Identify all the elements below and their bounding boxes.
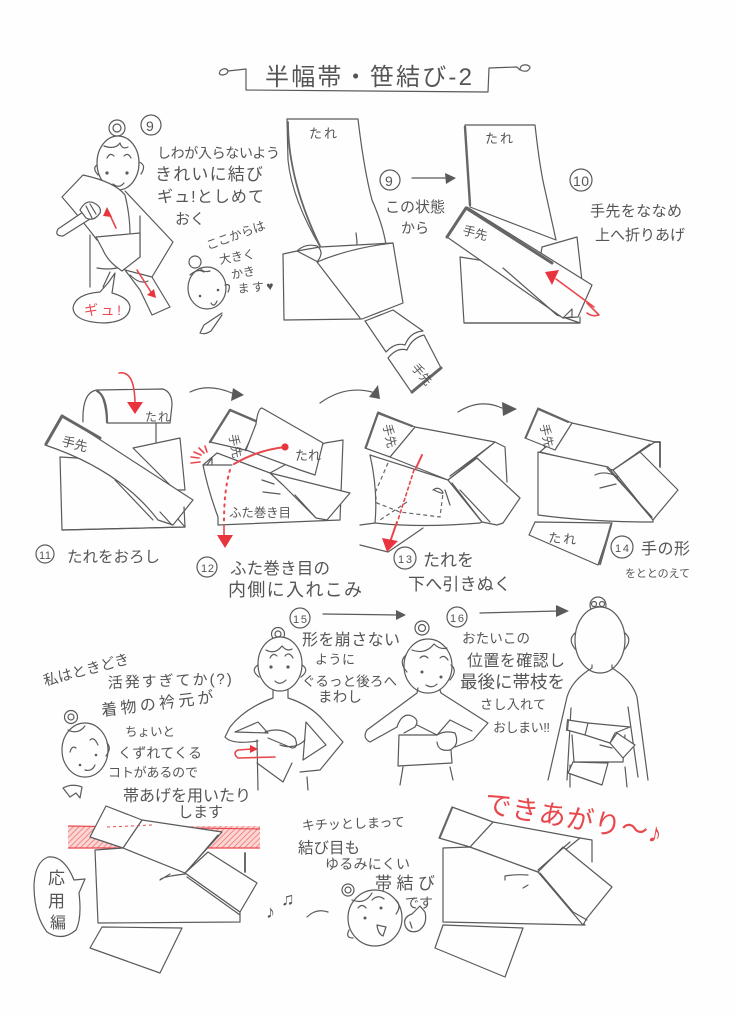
instruction text step 16: さし入れて [480,697,546,712]
diagram: arrange te shape: 手先 [537,423,556,449]
instruction text step 9 [155,145,280,228]
side note text: くずれてくる [118,745,202,761]
step number 10 [570,169,592,191]
side note: from here drawn large [204,218,274,296]
panel: step 16 [365,597,648,787]
panel: applied version note [34,651,260,973]
caption step 11: 11 [39,550,51,562]
diagram: arrange te shape [525,408,678,565]
side note: from here drawn large: ここからは [204,218,267,253]
panel: step 12 [191,408,362,600]
panel: middle comment [266,814,435,946]
diagram: lower the tare: たれ [145,410,170,424]
step number 16 with arrow [447,605,569,627]
side note: from here drawn large: ます♥ [237,279,274,296]
caption step 14: 14 [615,543,629,555]
title: 半幅帯・笹結び-2 [265,64,472,91]
instruction text step 15: ように [315,652,355,667]
diagram: fold te-saki diagonally: 手先 [461,223,489,243]
instruction text step 9: おく [175,211,205,228]
caption step 13 [394,547,511,594]
side note text: 帯あげを用いたり [123,787,251,805]
instruction text step 10: 手先をななめ [590,203,682,220]
arrow: 13 to 14 [458,402,517,416]
panel: step 15 [225,608,406,790]
caption: から [401,220,429,236]
figure: back view woman [548,597,648,787]
arrow: 11 to 12 [190,388,244,401]
panel: step 10 [447,125,685,323]
music notes: ♪ [266,902,275,922]
speech bubble: gyu: ギュ! [84,302,121,318]
title [219,64,530,92]
step number 15 with arrow [290,608,406,628]
side note text: 私はときどき [42,651,131,690]
diagram: fold te-saki diagonally [447,125,599,323]
side note: from here drawn large: かき [230,264,256,282]
step number 9 [141,115,161,135]
diagram: finished knot [435,807,612,977]
instruction text step 16: 最後に帯枝を [460,672,565,692]
diagram: with obiage band [68,806,260,973]
diagram: arrange te shape: たれ [548,530,577,547]
side note text: します [178,804,223,821]
comment text: です [405,895,433,911]
side note text [42,651,251,821]
step number 10: 10 [573,173,589,189]
annotation: from this state [380,170,456,236]
red arrow: lower tare [119,373,143,414]
speech bubble: applied version: 編 [50,914,66,932]
instruction text step 16: おたいこの [462,631,530,646]
figure: front woman [365,621,488,785]
diagram: pull tare down [360,412,520,552]
figure: woman tightening obi [57,120,173,315]
caption step 13: 下へ引きぬく [408,575,511,594]
diagram: lower the tare: 手先 [60,433,89,455]
step number 8: 9 [385,173,393,189]
small head with hand [62,710,109,798]
diagram: lower the tare [45,389,193,530]
red pull arrow [382,455,422,552]
side note text: 活発すぎてか(?) [108,671,232,692]
instruction text step 10 [590,203,685,244]
diagram: pull tare down: 手先 [380,423,399,449]
side note text: コトがあるので [108,765,198,780]
music notes: ♫ [281,889,294,909]
panel: step 8 obi state [283,119,441,393]
panel: finished result [435,788,664,977]
side note text: ちょいと [125,725,175,739]
instruction text step 9: きれいに結び [155,165,263,184]
figure: turning the knot around [225,628,343,790]
diagram: fold te-saki diagonally: たれ [485,131,513,146]
instruction text step 15: 形を崩さない [302,631,400,649]
comment text: 結び目も [298,839,360,857]
instruction text step 15: まわし [318,689,362,706]
speech bubble: applied version: 用 [48,892,65,911]
caption step 11 [36,545,160,566]
instruction text step 15 [302,631,400,706]
instruction text step 9: ギュ!としめて [157,188,264,206]
step number 15 with arrow: 15 [293,614,307,626]
small head with pointing hand [188,256,229,334]
panel: step 9 figure [57,115,280,334]
diagram: insert inside second wrap: ふた巻き目 [229,506,291,520]
instruction text step 10: 上へ折りあげ [595,227,685,244]
caption step 12 [197,557,362,600]
side note text: 着物の衿元が [100,688,215,720]
diagram: tare and knot: 手先 [409,361,435,388]
caption step 12: 内側に入れこみ [228,580,362,600]
instruction text step 16: おしまい!! [493,720,550,735]
comment text: ゆるみにくい [325,856,410,872]
caption: この状態 [385,199,445,216]
panel: step 13 [360,412,520,594]
step number 16 with arrow: 16 [450,613,464,625]
instruction text step 16: 位置を確認し [467,652,565,670]
comment text: 帯結び [375,874,435,893]
caption step 13: たれを [423,551,474,570]
panel: step 11 [36,373,193,566]
caption step 13: 13 [398,554,412,566]
diagram: insert inside second wrap [203,408,350,525]
speech bubble: applied version [34,857,85,937]
arrow: 12 to 13 [320,385,380,403]
step number 9: 9 [146,118,154,134]
music notes [266,889,328,922]
caption step 14: 手の形 [641,540,690,558]
comment text: キチッとしまって [302,814,405,833]
diagram: tare and knot [283,119,441,393]
instruction text step 9: しわが入らないよう [157,145,280,161]
panel: step 14 [525,408,690,580]
caption step 12: 12 [201,563,214,575]
diagram: insert inside second wrap: たれ [295,448,321,463]
comment text [298,814,435,911]
red insertion line and arrow [191,443,289,548]
caption step 14: をととのえて [625,567,690,580]
caption step 11: たれをおろし [67,548,160,566]
speech bubble: gyu [73,273,130,323]
arrow to step 10 [412,173,456,184]
side note: from here drawn large: 大きく [218,247,256,267]
caption step 12: ふた巻き目の [230,559,330,578]
instruction text step 16 [460,631,565,735]
heading: finished: できあがり〜♪ [482,788,664,849]
speech bubble: applied version: 応 [48,869,65,888]
diagram: insert inside second wrap: 手先 [226,433,244,459]
smiling head with hand [342,884,426,946]
caption [385,199,445,236]
diagram: tare and knot: たれ [309,126,337,141]
caption step 14 [611,536,690,580]
instruction text step 15: ぐるっと後ろへ [302,674,397,689]
